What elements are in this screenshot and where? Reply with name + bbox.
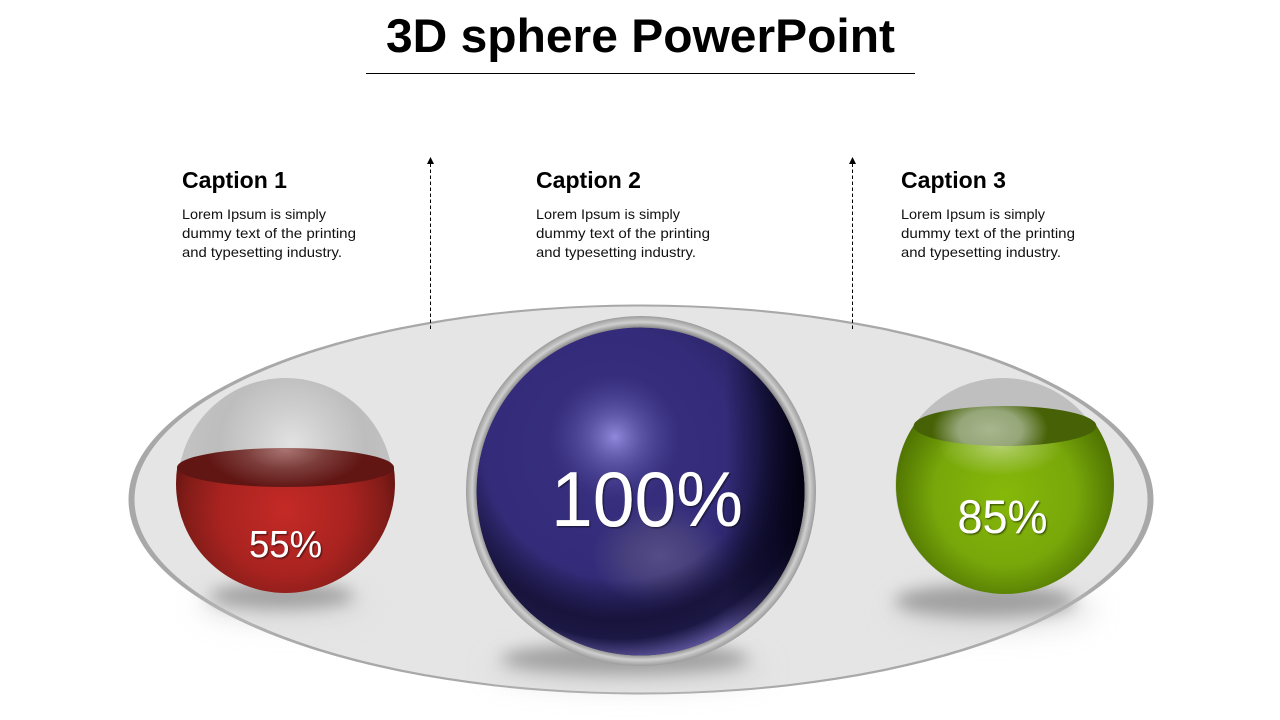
caption 2: dummy text of the printing xyxy=(536,225,710,241)
value 55%: 55% xyxy=(249,524,322,566)
caption 2 xyxy=(536,167,710,260)
arrow left xyxy=(427,157,434,329)
caption 2: Lorem Ipsum is simply xyxy=(536,206,680,222)
title underline xyxy=(366,73,915,74)
sphere shadow: red xyxy=(196,583,372,624)
caption 1 xyxy=(182,167,356,260)
caption 1: Caption 1 xyxy=(182,167,287,193)
glass top: red xyxy=(178,378,393,593)
sphere shadow: blue xyxy=(490,644,766,688)
blue ball xyxy=(476,320,810,660)
red sphere 55% xyxy=(176,374,395,593)
caption 1: and typesetting industry. xyxy=(182,244,342,260)
sphere shadow: green xyxy=(888,585,1096,632)
value 100%: 100% xyxy=(551,455,743,543)
green sphere 85% xyxy=(896,376,1114,594)
caption 3: Caption 3 xyxy=(901,167,1006,193)
blue sphere 100% xyxy=(466,316,816,666)
green liquid body xyxy=(896,426,1114,594)
caption 2: Caption 2 xyxy=(536,167,641,193)
caption 1: dummy text of the printing xyxy=(182,225,356,241)
caption 3: Lorem Ipsum is simply xyxy=(901,206,1045,222)
platform ellipse xyxy=(128,304,1154,694)
value 85%: 85% xyxy=(958,490,1048,543)
red liquid body xyxy=(176,468,395,593)
caption 3: and typesetting industry. xyxy=(901,244,1061,260)
caption 1: Lorem Ipsum is simply xyxy=(182,206,326,222)
caption 2: and typesetting industry. xyxy=(536,244,696,260)
metal ring xyxy=(466,316,816,666)
arrow right xyxy=(849,157,856,329)
caption 3: dummy text of the printing xyxy=(901,225,1075,241)
glass top: green xyxy=(896,378,1110,593)
title: 3D sphere PowerPoint xyxy=(386,9,895,62)
caption 3 xyxy=(901,167,1075,260)
green liquid rim xyxy=(914,406,1096,446)
red liquid rim xyxy=(177,448,394,487)
